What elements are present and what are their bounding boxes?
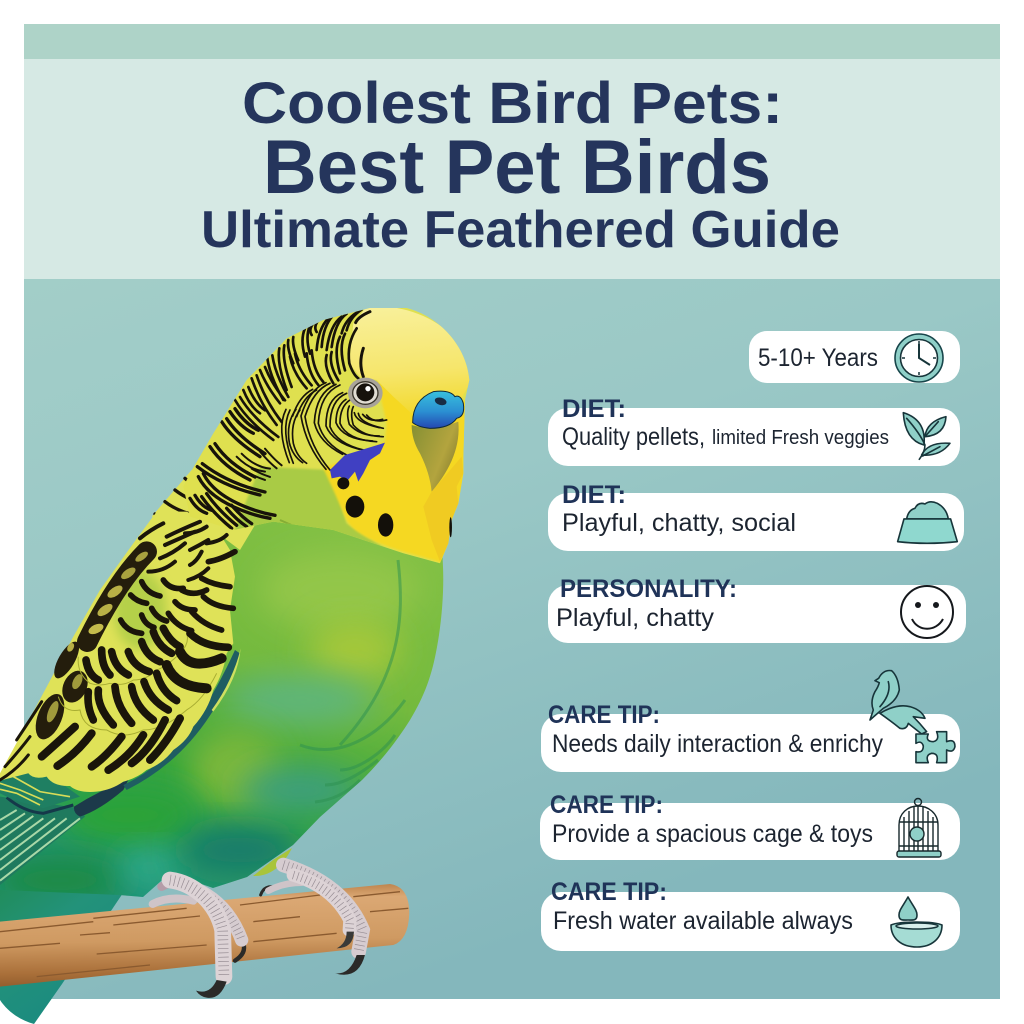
text: Provide a spacious cage & toys xyxy=(552,820,873,848)
crown xyxy=(349,306,472,415)
title line 2: Best Pet Birds xyxy=(263,125,771,210)
pill xyxy=(541,892,960,951)
eye arcs xyxy=(286,383,387,470)
text: Fresh water available always xyxy=(553,907,853,935)
budgerigar illustration xyxy=(0,300,480,1024)
perch xyxy=(0,884,409,987)
secondary eye arcs xyxy=(282,383,383,469)
wing pale edge feather xyxy=(212,648,241,712)
row: care tip cage xyxy=(540,791,960,860)
head bars xyxy=(190,313,358,528)
lower left small coverts xyxy=(0,763,80,808)
row: diet social xyxy=(548,481,964,551)
title xyxy=(201,71,840,259)
title line 3: Ultimate Feathered Guide xyxy=(201,201,840,259)
icon: bird on hand with puzzle xyxy=(870,670,955,763)
icon: smiley xyxy=(901,586,953,638)
eye xyxy=(348,378,383,408)
cheek green xyxy=(234,466,384,547)
text: Playful, chatty xyxy=(556,604,714,632)
beard xyxy=(423,457,463,562)
icon: clock xyxy=(895,334,943,382)
wing lime wash xyxy=(113,570,167,650)
text: Needs daily interaction & enrichy xyxy=(552,730,883,758)
label: CARE TIP: xyxy=(550,791,663,819)
top band xyxy=(24,24,1000,60)
nape and head base xyxy=(184,308,470,564)
violet cheek patch xyxy=(330,443,385,482)
pill xyxy=(548,585,966,643)
left foot xyxy=(153,880,244,998)
head xyxy=(184,308,470,564)
label: DIET: xyxy=(562,481,626,509)
icon: bird cage xyxy=(897,798,941,857)
nostril xyxy=(434,396,447,406)
beak xyxy=(412,422,459,492)
flight feathers xyxy=(0,780,128,885)
row: lifespan xyxy=(749,331,960,383)
secondary head bars xyxy=(195,310,363,525)
row: care tip interaction xyxy=(541,670,960,772)
icon: leaves xyxy=(903,413,950,459)
pill xyxy=(540,803,960,860)
header band xyxy=(24,59,1000,279)
text: 5-10+ Years xyxy=(758,344,878,372)
body shading xyxy=(0,550,420,906)
wing xyxy=(0,470,260,808)
label: CARE TIP: xyxy=(551,878,667,906)
scallop outlines xyxy=(58,633,217,735)
shoulder patch joining nape to wing xyxy=(152,470,260,550)
wing lower teal strip xyxy=(123,650,240,790)
text: Playful, chatty, social xyxy=(562,509,796,537)
row: care tip water xyxy=(541,878,960,951)
yellow underside near foot xyxy=(253,848,292,876)
dark long feathers xyxy=(30,550,150,743)
pill xyxy=(548,493,964,551)
small text: limited Fresh veggies xyxy=(712,427,889,449)
row: personality xyxy=(548,575,966,643)
crown edge bars xyxy=(356,312,370,377)
label: CARE TIP: xyxy=(548,701,660,729)
pill xyxy=(749,331,960,383)
breast boundary xyxy=(280,519,292,524)
label: DIET: xyxy=(562,395,626,423)
icon: water drop and bowl xyxy=(891,897,942,947)
pill xyxy=(541,714,960,772)
body xyxy=(0,400,443,897)
row: diet pellets xyxy=(548,395,960,466)
wing base xyxy=(0,512,235,792)
tail xyxy=(0,850,125,1024)
label: PERSONALITY: xyxy=(560,575,737,603)
face yellow xyxy=(323,380,467,567)
throat spots xyxy=(337,477,452,537)
right foot xyxy=(261,865,365,975)
pill xyxy=(548,408,960,466)
cere xyxy=(413,391,464,428)
text: Quality pellets, xyxy=(562,423,705,451)
title line 1: Coolest Bird Pets: xyxy=(242,71,783,136)
black feather bars xyxy=(0,522,235,780)
icon: food bowl xyxy=(898,502,957,543)
